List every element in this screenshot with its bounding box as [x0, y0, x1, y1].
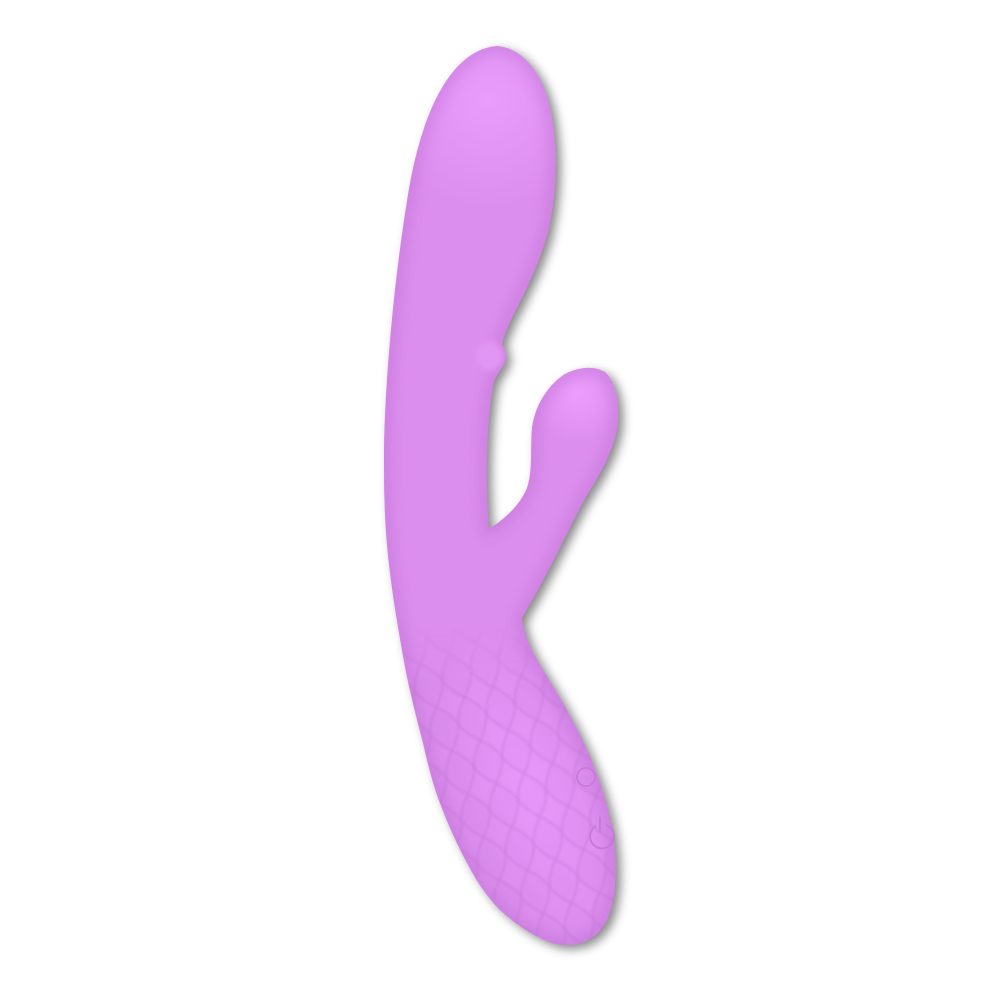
drop shadow — [389, 50, 623, 949]
product body — [384, 46, 618, 946]
shaded edges — [384, 46, 618, 945]
small nub shading — [477, 342, 503, 370]
button: power control — [590, 817, 614, 848]
highlight: main tip — [435, 54, 554, 152]
highlight: handle — [502, 738, 558, 842]
button: upper control — [577, 768, 595, 786]
diamond texture on handle — [413, 662, 612, 934]
product illustration — [382, 44, 630, 956]
highlight: small arm tip — [556, 372, 602, 418]
